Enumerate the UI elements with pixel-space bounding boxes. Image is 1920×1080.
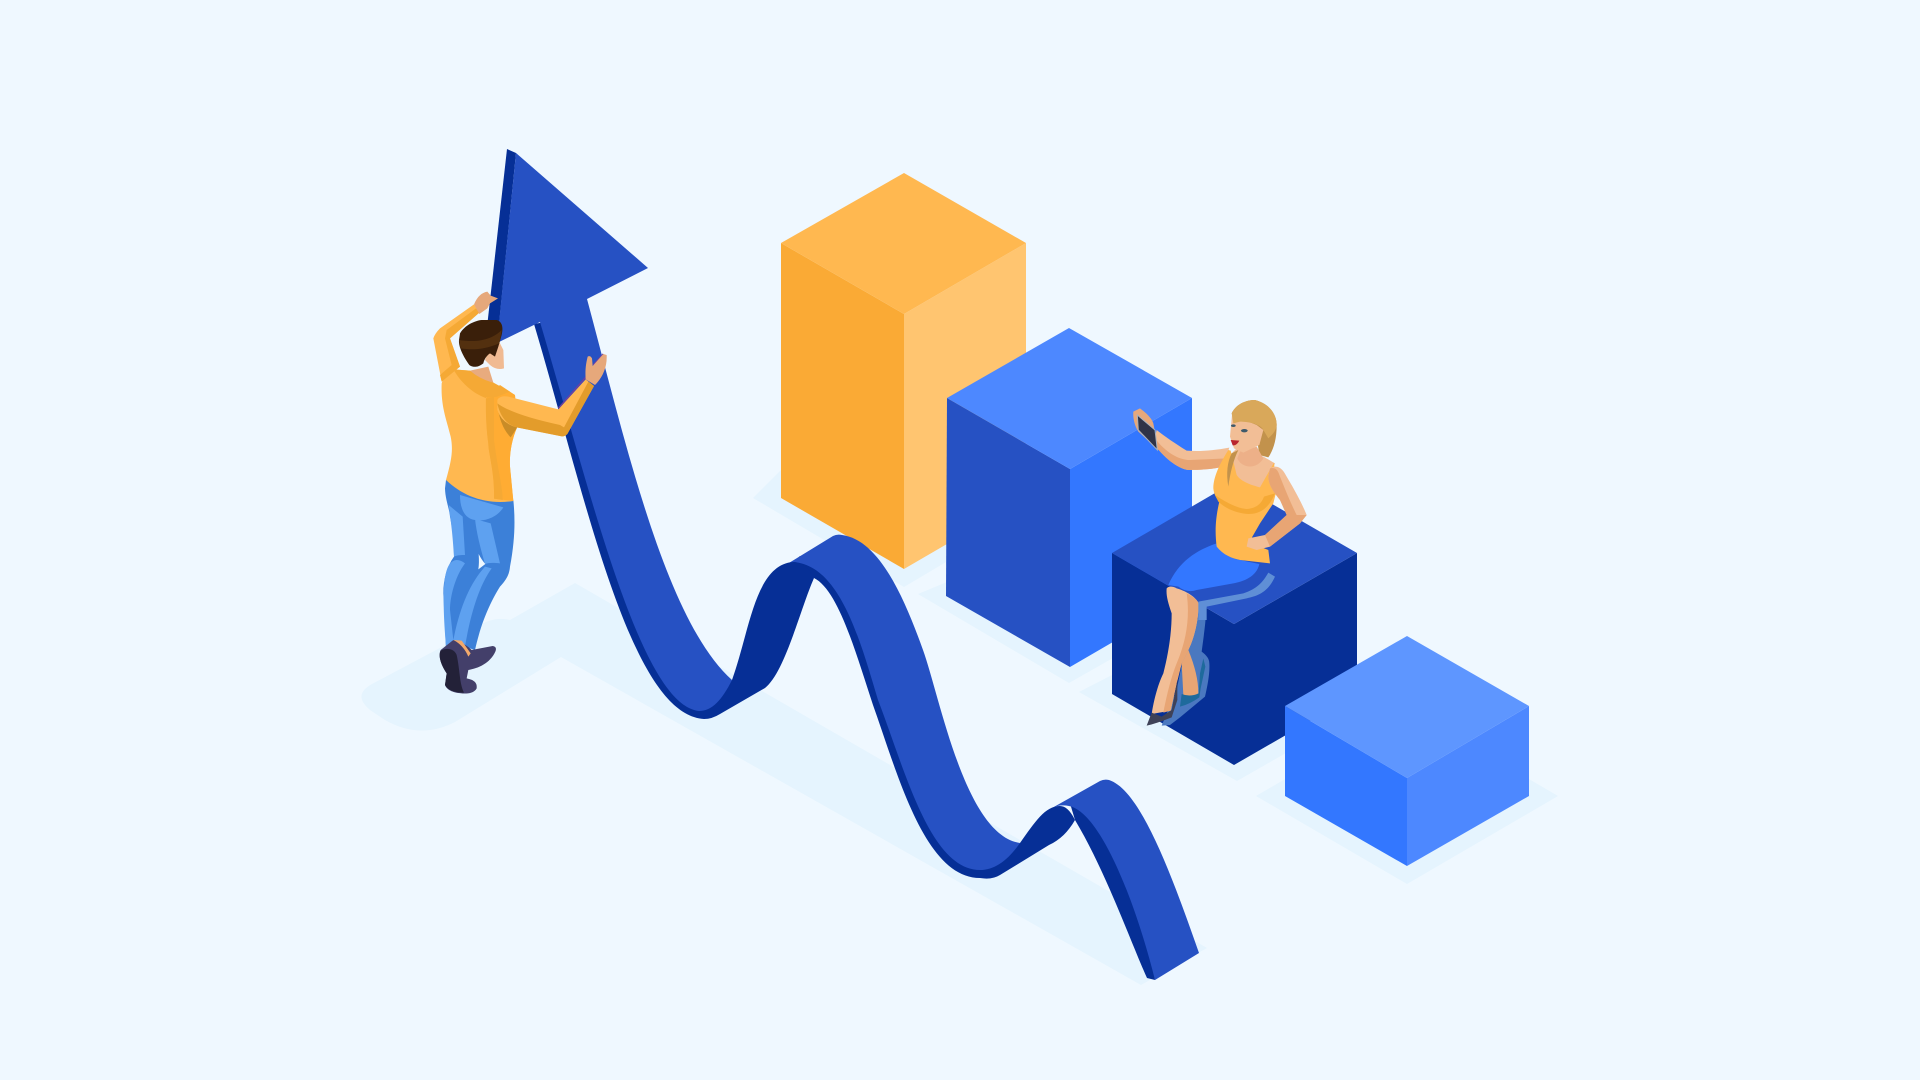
arrow end ribbon side [1069,800,1155,980]
arrow end ribbon [1052,780,1199,980]
light top face [1285,636,1529,778]
light right face [1407,706,1529,866]
woman back leg [1182,650,1198,696]
dark top face [1112,482,1357,624]
blue top face [947,328,1192,469]
woman hair top [1232,400,1277,438]
man raised arm and head [433,292,504,382]
woman leg shadow [1147,587,1209,726]
orange top face [781,173,1026,314]
light left face [1285,706,1407,866]
dark right face [1234,553,1357,765]
blue right face [1070,398,1192,667]
woman face [1230,415,1263,453]
orange left face [781,243,904,569]
man right hand [585,354,607,385]
woman skirt [1168,543,1259,591]
dark blue bar cube [1112,482,1357,765]
man lifting arrow [433,292,607,694]
light blue bar cube [1285,636,1529,866]
arrow second fold [793,556,1075,879]
woman with phone [1133,400,1307,726]
arrow ground shadow [361,583,1207,985]
skirt shadow [1198,573,1275,620]
woman tank top [1213,450,1277,563]
woman hand and phone [1133,408,1158,450]
woman hair back [1232,400,1277,457]
woman neck and chest [1228,448,1275,488]
box shadows [753,470,1558,884]
medium blue bar cube [946,328,1192,667]
man face [485,333,504,369]
man legs [440,480,514,694]
man left hand [474,292,498,314]
dark left face [1112,553,1234,765]
blue left face [946,398,1070,667]
orange bar cube [781,173,1026,569]
woman side arm [1247,467,1307,550]
woman front shoe [1147,680,1177,726]
woman front leg [1152,587,1199,714]
woman raised arm [1153,430,1229,470]
arrow first fold [534,322,814,719]
man torso and arm [442,354,607,502]
woman upper body [1133,400,1307,620]
arrow head side [485,149,516,345]
growth arrow [485,149,1199,980]
orange right face [904,243,1026,569]
arrow middle ribbon [784,535,1020,870]
arrow head and shaft [497,153,732,711]
man shoes [440,640,496,694]
man hair [459,320,502,367]
woman mouth and eyes [1231,440,1239,445]
woman back shoe [1180,658,1205,707]
